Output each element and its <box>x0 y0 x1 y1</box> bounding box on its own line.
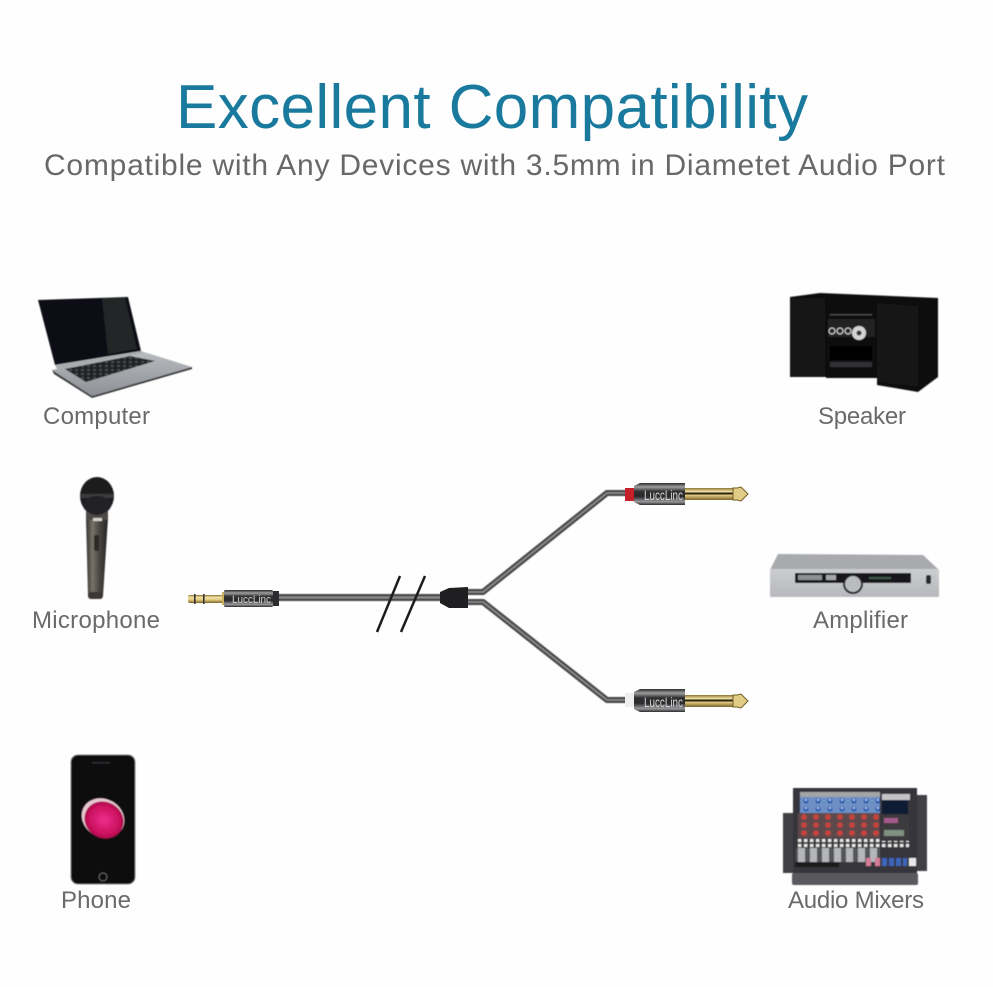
splitter <box>440 587 468 608</box>
subtitle: Compatible with Any Devices with 3.5mm in Diametet Audio Port <box>44 149 946 182</box>
icon: laptop <box>38 297 192 398</box>
icon: speaker system <box>790 293 938 392</box>
device: speaker <box>790 293 938 430</box>
3.5mm plug <box>188 590 279 607</box>
lower 6.35mm plug <box>625 689 748 712</box>
device: computer <box>38 297 192 430</box>
cable strands <box>276 493 626 700</box>
icon: microphone <box>80 477 114 599</box>
break marks <box>377 576 425 632</box>
upper 6.35mm plug: LuccLinc <box>644 487 683 503</box>
upper 6.35mm plug <box>625 483 748 505</box>
label: computer: Computer <box>43 403 150 430</box>
cable diagram <box>188 483 748 712</box>
lower 6.35mm plug: LuccLinc <box>644 694 683 710</box>
label: microphone: Microphone <box>32 607 160 634</box>
label: amplifier: Amplifier <box>813 607 908 634</box>
label: audio mixers: Audio Mixers <box>788 887 924 914</box>
label: speaker: Speaker <box>818 403 906 430</box>
device: phone <box>61 755 135 914</box>
label: phone: Phone <box>61 887 131 914</box>
3.5mm plug: LuccLinc <box>232 594 271 606</box>
device: amplifier <box>770 554 939 634</box>
device: microphone <box>32 477 160 634</box>
icon: audio mixer <box>783 788 927 885</box>
title: Excellent Compatibility <box>176 73 808 142</box>
device: audio mixer <box>783 788 927 914</box>
icon: phone <box>71 755 135 884</box>
icon: amplifier <box>770 554 939 597</box>
